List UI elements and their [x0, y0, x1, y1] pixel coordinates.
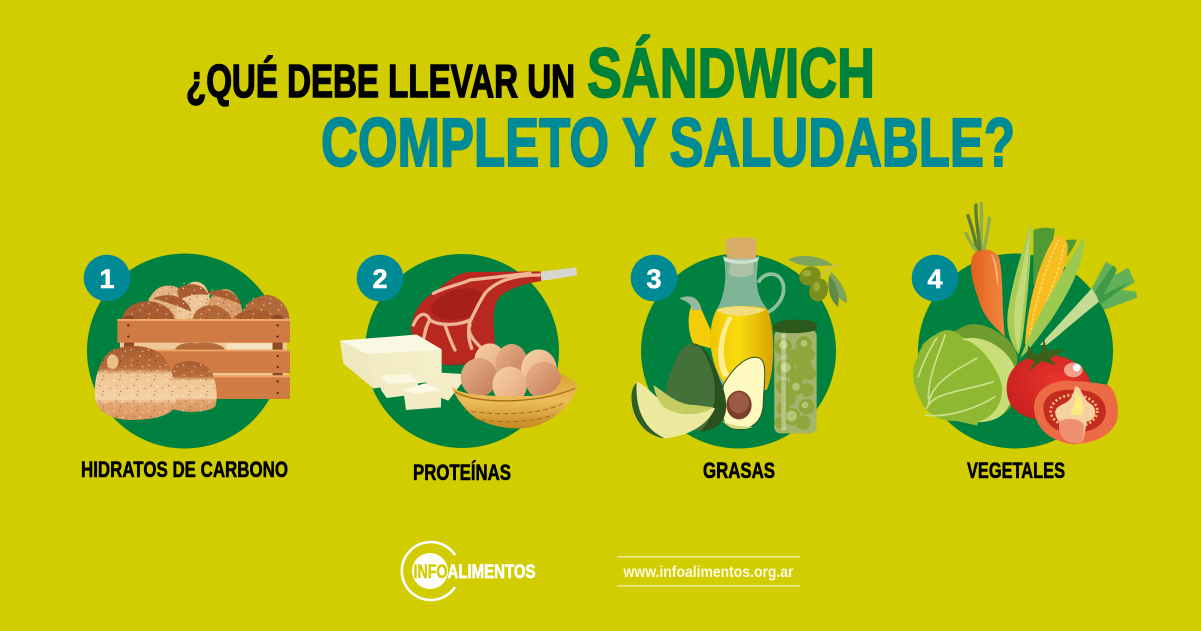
green circle 3 — [641, 254, 836, 448]
logo: infoalimentos: INFO — [414, 562, 448, 583]
badge 1: 1 — [99, 264, 115, 294]
panel: hidratos de carbono — [81, 254, 290, 482]
panel: grasas — [631, 237, 847, 483]
badge 4: 4 — [927, 264, 943, 294]
title — [186, 34, 1015, 181]
badge 4 — [912, 255, 958, 301]
icon: crate of bread — [95, 282, 290, 420]
tomato stem — [1027, 338, 1067, 372]
panel: vegetales — [912, 203, 1137, 483]
carrot — [971, 250, 1005, 337]
corn husk back — [1033, 228, 1077, 285]
logo: infoalimentos: ALIMENTOS — [448, 562, 536, 583]
icon: vegetables — [913, 203, 1137, 444]
label: VEGETALES — [967, 458, 1065, 483]
avocado whole — [665, 343, 726, 431]
green circle 2 — [365, 254, 559, 448]
panel: proteinas — [340, 254, 578, 485]
badge 1 — [84, 255, 130, 301]
website link: www.infoalimentos.org.ar — [623, 564, 794, 581]
lettuce front — [913, 330, 1002, 426]
corn leaf left — [1007, 223, 1032, 354]
corn leaf right — [1020, 237, 1084, 358]
label: PROTEÍNAS — [413, 460, 511, 485]
icon: oil, avocado, olives — [631, 237, 847, 438]
badge 2: 2 — [372, 264, 388, 294]
tomato cut — [1034, 381, 1118, 444]
green circle 4 — [918, 254, 1113, 448]
badge 3 — [631, 255, 677, 301]
olive branch — [788, 256, 847, 307]
title: ¿QUÉ DEBE LLEVAR UN — [186, 55, 575, 107]
tomato — [1007, 355, 1092, 420]
carrot top — [966, 203, 989, 250]
label: GRASAS — [703, 458, 775, 483]
title: SÁNDWICH — [587, 34, 875, 112]
avocado half — [722, 357, 765, 429]
avocado slice — [631, 382, 715, 438]
lettuce back — [922, 324, 1017, 422]
corn — [1025, 236, 1068, 345]
badge 3: 3 — [646, 264, 662, 294]
logo: infoalimentos — [402, 542, 536, 600]
icon: meat, tofu, eggs — [340, 267, 578, 428]
jar of olives — [773, 320, 817, 433]
badge 2 — [357, 255, 403, 301]
label: HIDRATOS DE CARBONO — [81, 457, 288, 482]
green circle 1 — [87, 254, 282, 448]
leek — [1040, 287, 1103, 345]
